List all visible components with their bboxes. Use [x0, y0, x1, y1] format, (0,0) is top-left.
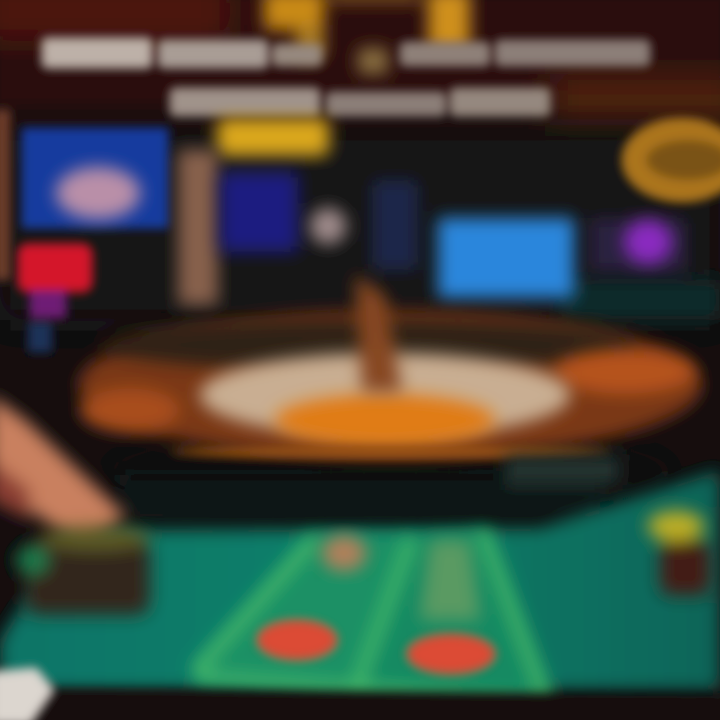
wheel inner white ring: [200, 353, 570, 437]
red bet oval right: [407, 634, 495, 674]
left edge pillar: [0, 110, 10, 280]
hand: [0, 395, 125, 550]
gold ceiling sign: [264, 0, 470, 74]
white object bottom left: [0, 668, 54, 720]
dark blue screen: [220, 172, 298, 252]
purple screen: [590, 218, 686, 272]
yellow sign: [217, 118, 329, 156]
chip stack left: [16, 526, 150, 615]
roulette wheel: [78, 275, 702, 518]
dark table edge: [120, 455, 620, 517]
green felt table: [0, 470, 720, 705]
red bet oval left: [257, 620, 337, 660]
title: blurred text bars: [42, 38, 650, 116]
wheel orange centre: [275, 394, 495, 446]
red and purple sign: [18, 244, 92, 352]
betting layout: [195, 535, 415, 690]
light blue screen: [438, 218, 574, 298]
orange marker top: [322, 535, 366, 571]
tan pillar: [178, 150, 218, 305]
gold oval sign right: [622, 118, 720, 202]
wheel spindle: [355, 275, 402, 392]
figures in the background: [310, 180, 418, 270]
dark bottom edge: [0, 688, 720, 720]
blue screen left: [22, 128, 168, 228]
chip stack right: [648, 511, 710, 595]
